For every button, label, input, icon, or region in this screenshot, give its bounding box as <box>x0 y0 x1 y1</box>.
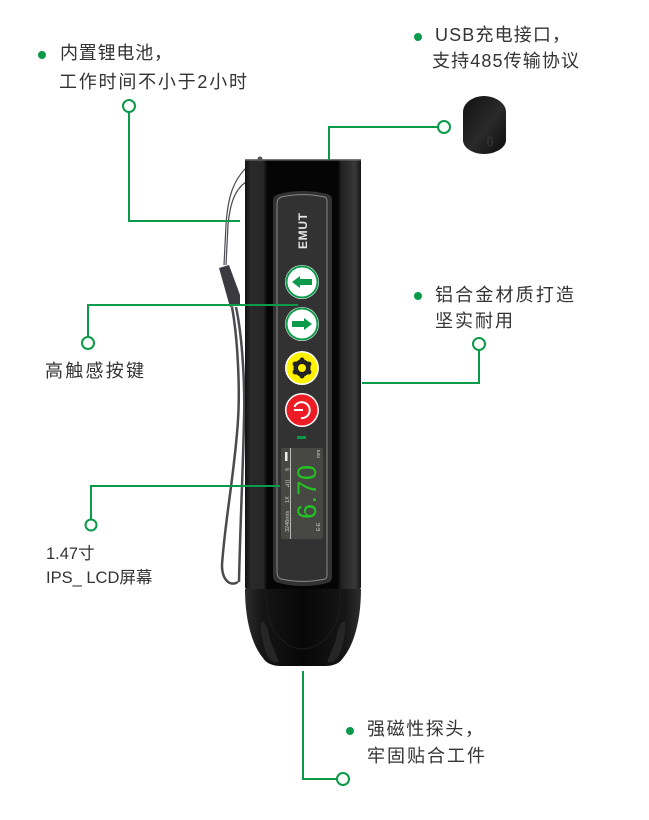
probe text <box>346 719 485 766</box>
indicator light <box>297 436 306 439</box>
LCD text: IPS_ LCD屏幕 <box>46 568 152 587</box>
icon: USB port end view <box>463 96 506 154</box>
LCD screen <box>281 448 323 539</box>
USB text: 支持485传输协议 <box>432 51 579 71</box>
LCD screen: 1X <box>285 496 291 503</box>
button: settings gear <box>285 351 319 385</box>
button: power <box>285 393 319 427</box>
probe text: 牢固贴合工件 <box>367 746 485 766</box>
battery text: 工作时间不小于2小时 <box>59 72 247 92</box>
LCD screen: E-E <box>316 522 322 531</box>
keys text: 高触感按键 <box>45 361 144 381</box>
LCD screen: ⊿)) <box>285 480 291 488</box>
icon: wrist strap <box>219 168 246 584</box>
probe text: 强磁性探头， <box>367 719 483 739</box>
LCD text: 1.47寸 <box>46 544 95 563</box>
USB text: USB充电接口， <box>435 25 570 45</box>
LCD screen: 3246m/s <box>285 511 291 532</box>
callout: battery <box>38 43 247 221</box>
probe cap <box>245 589 361 666</box>
callout: aluminium body <box>362 285 574 383</box>
aluminium text: 铝合金材质打造 <box>435 285 574 305</box>
control panel <box>273 191 332 586</box>
LCD screen: § <box>285 468 291 471</box>
callout: USB <box>329 25 579 160</box>
battery text: 内置锂电池， <box>60 43 172 63</box>
callout: LCD <box>46 486 280 587</box>
button: right arrow <box>285 307 319 341</box>
device body <box>245 156 361 666</box>
callout: keys <box>45 305 298 381</box>
LCD screen: 6.70 <box>292 465 322 519</box>
LCD text <box>46 544 152 587</box>
LCD screen: mm <box>316 450 322 458</box>
brand label: EMUT <box>296 212 310 249</box>
battery text <box>38 43 247 92</box>
USB text <box>414 25 579 71</box>
button: left arrow <box>285 265 319 299</box>
aluminium text <box>414 285 574 331</box>
aluminium text: 坚实耐用 <box>435 311 513 331</box>
callout: magnetic probe <box>303 671 485 785</box>
